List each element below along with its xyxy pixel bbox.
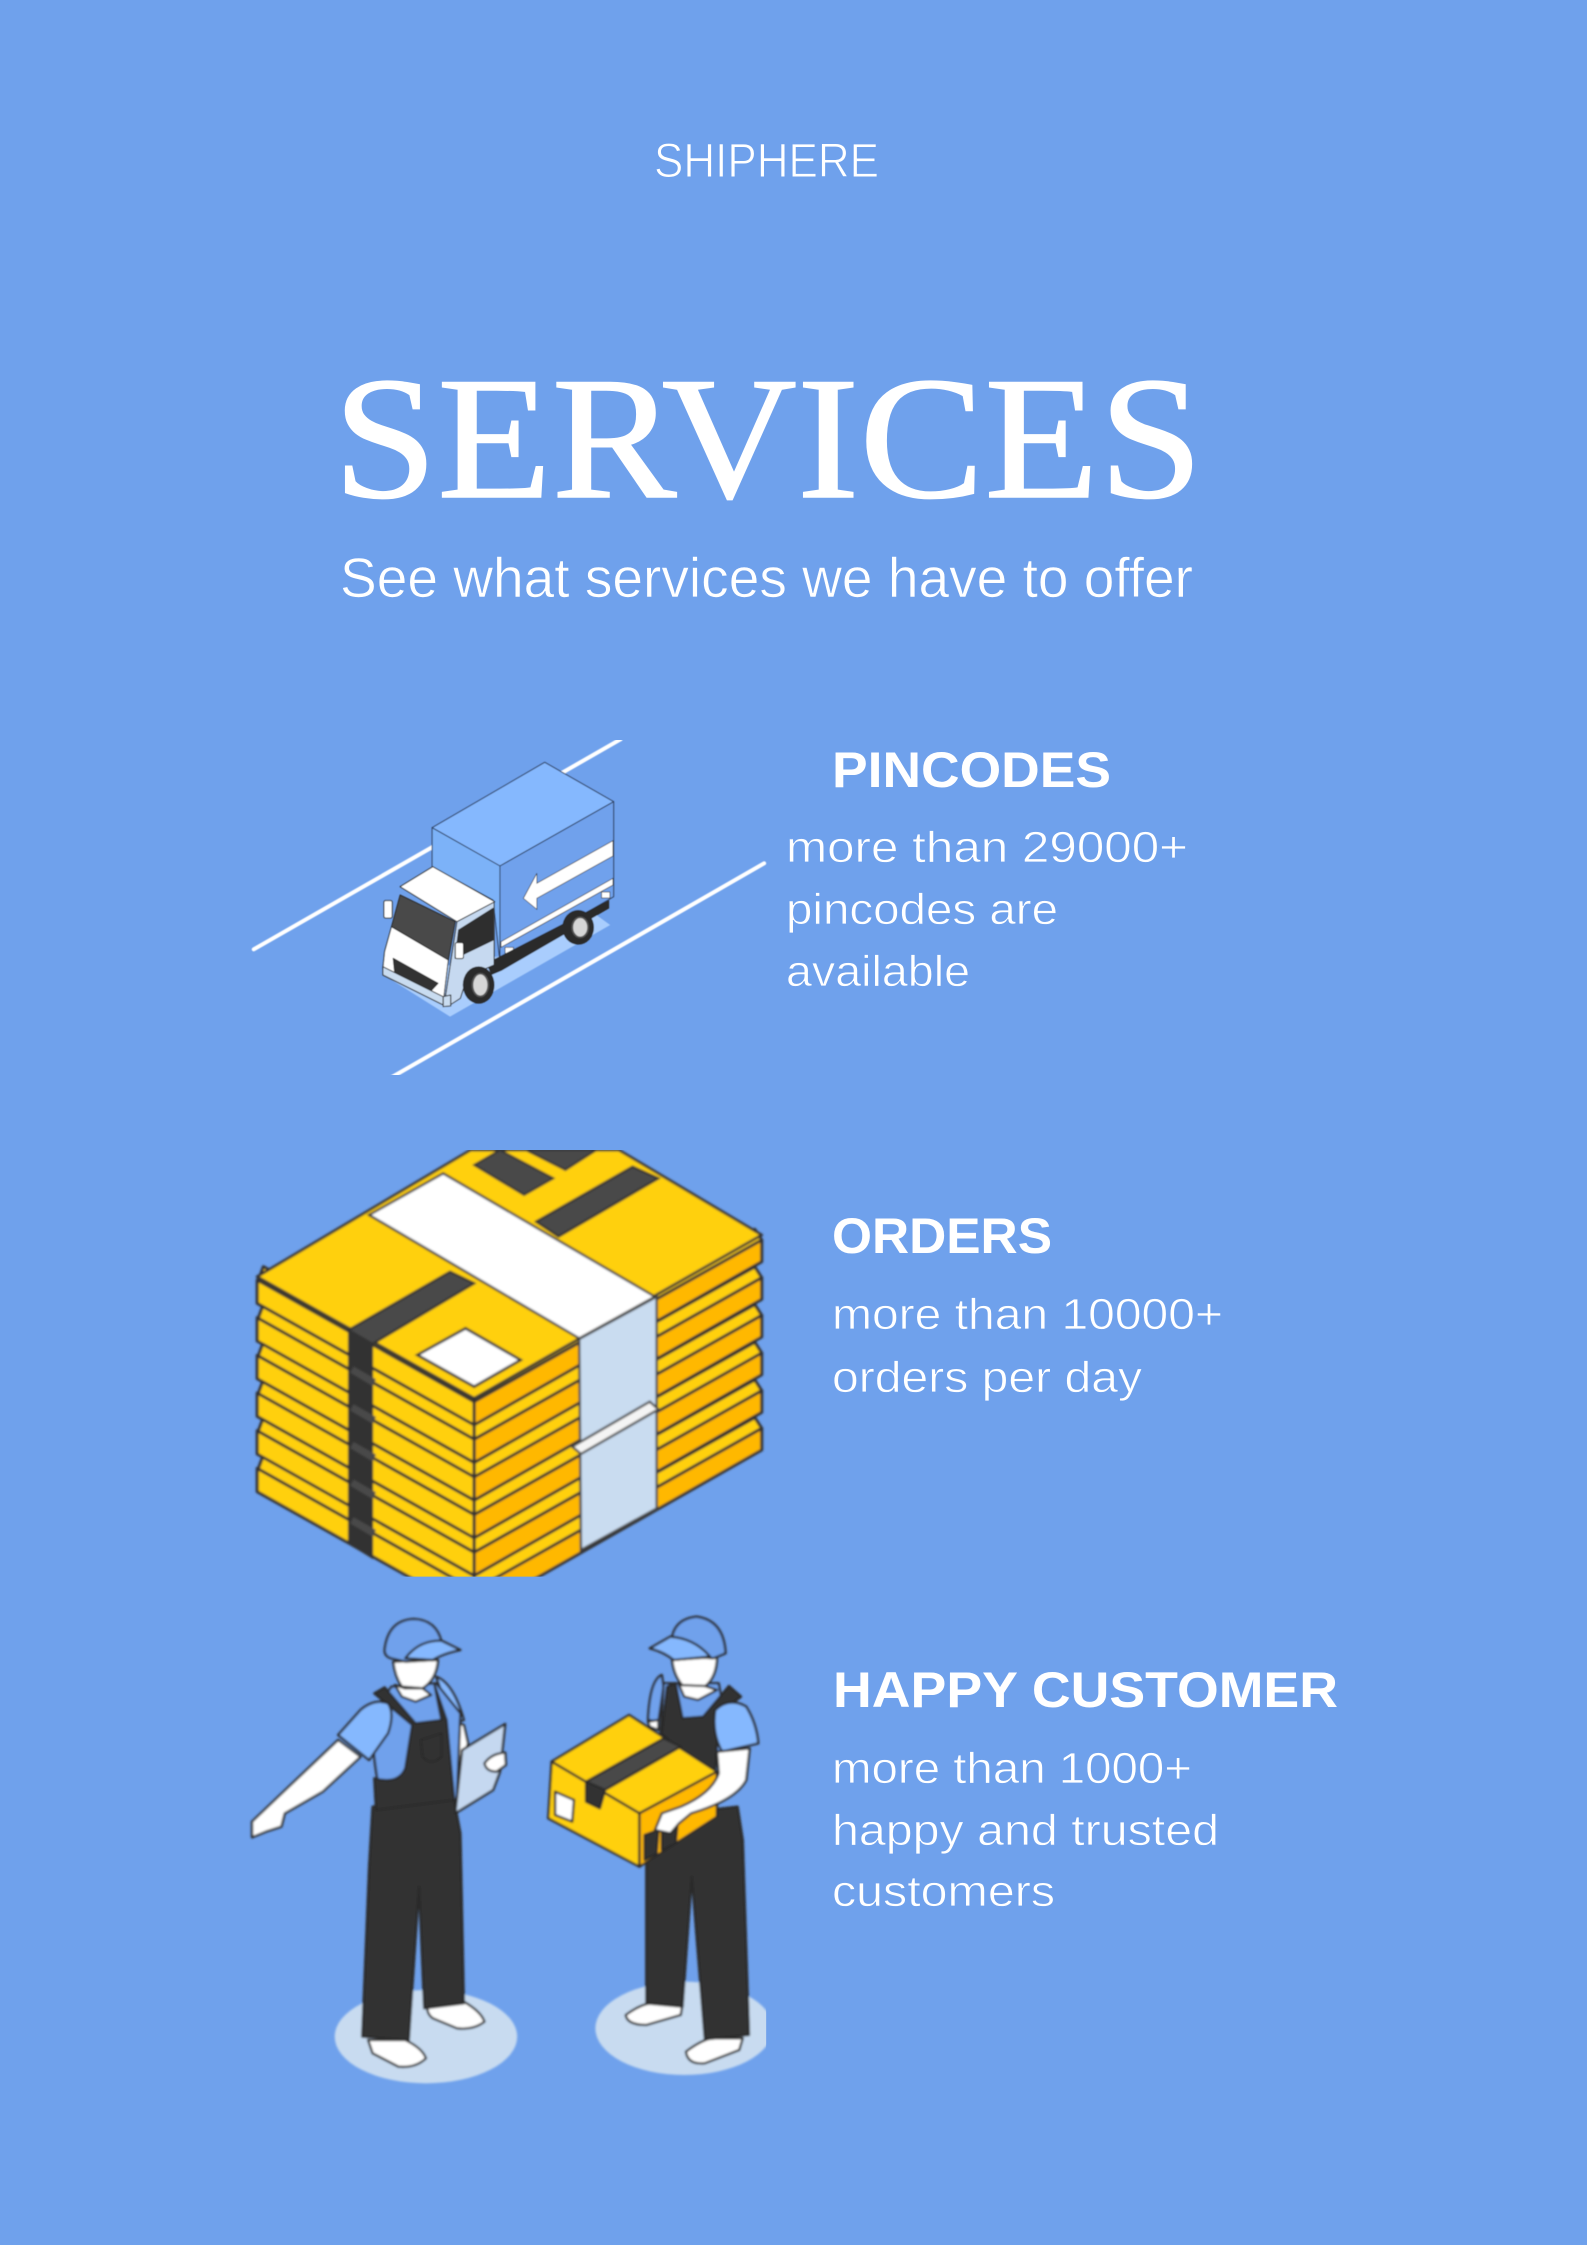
truck shadow <box>386 915 610 1017</box>
arrow on cargo box <box>523 841 613 909</box>
body: orders: orders per day <box>832 1353 1142 1402</box>
subtitle: See what services we have to offer <box>340 546 1193 609</box>
body: happy customer <box>832 1744 1219 1916</box>
cargo box <box>432 762 614 963</box>
heading: pincodes: PINCODES <box>832 742 1111 798</box>
truck cab <box>383 867 495 1007</box>
dark tape on top <box>348 1272 474 1344</box>
heading: happy customer: HAPPY CUSTOMER <box>833 1662 1338 1718</box>
body: pincodes: available <box>786 947 970 996</box>
white label on top <box>417 1328 521 1387</box>
white tape <box>369 1173 655 1338</box>
illustration: stack of packages <box>257 1150 762 1613</box>
dark labels on top <box>474 1150 553 1195</box>
service text: pincodes <box>786 742 1188 996</box>
heading: orders: ORDERS <box>832 1208 1052 1264</box>
floor shadows <box>335 1982 773 2083</box>
cargo stripe <box>501 878 613 947</box>
front wheel <box>463 966 494 1004</box>
side tape dark <box>348 1330 373 1558</box>
body: pincodes <box>786 823 1188 996</box>
body: happy customer: more than 1000+ <box>832 1744 1192 1793</box>
body: happy customer: customers <box>832 1867 1055 1916</box>
body: happy customer: happy and trusted <box>832 1806 1219 1855</box>
illustration: two delivery workers <box>252 1617 773 2083</box>
body: pincodes: more than 29000+ <box>786 823 1188 872</box>
package layers <box>257 1229 762 1613</box>
tape gap <box>572 1402 658 1454</box>
brand name: SHIPHERE <box>654 135 879 188</box>
infographic page <box>249 144 1337 2085</box>
worker left with clipboard <box>252 1619 506 2067</box>
body: pincodes: pincodes are <box>786 885 1058 934</box>
illustration: delivery truck on road <box>254 739 764 1077</box>
tape bumps <box>350 1367 376 1537</box>
side tape light <box>579 1297 657 1550</box>
chassis <box>486 900 609 975</box>
worker right with box <box>548 1617 758 2064</box>
rear wheel <box>562 910 594 945</box>
service text: orders <box>832 1208 1223 1402</box>
body: orders <box>832 1290 1223 1402</box>
body: orders: more than 10000+ <box>832 1290 1223 1339</box>
service text: happy customer <box>832 1662 1338 1916</box>
top face <box>257 1150 762 1398</box>
title: SERVICES <box>333 341 1203 535</box>
road lines <box>254 739 764 1077</box>
